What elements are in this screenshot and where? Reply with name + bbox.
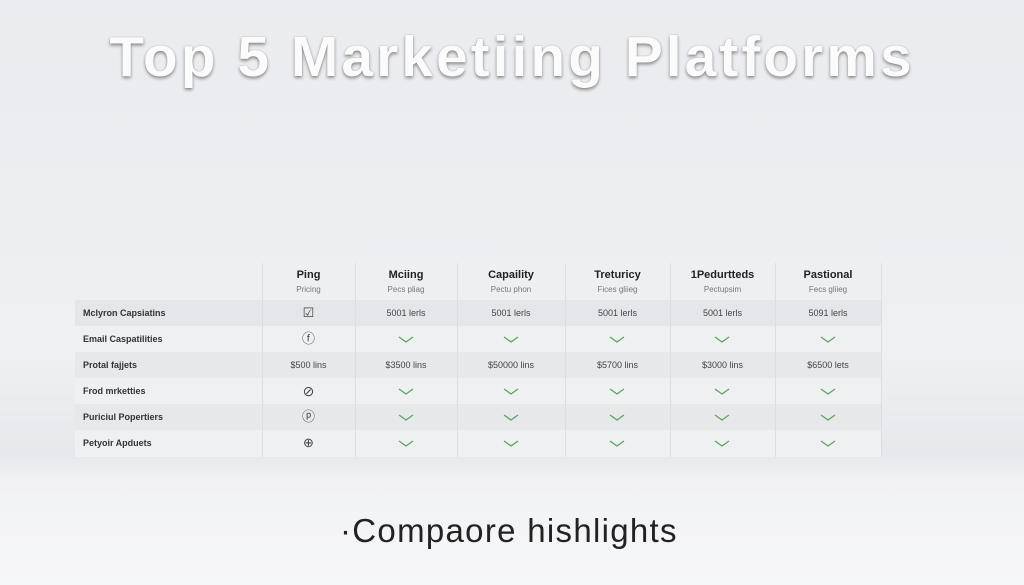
data cells: $5700 lins	[597, 360, 638, 370]
data cells: 5001 lerls	[386, 308, 426, 318]
title: Top 5 Marketiing Platforms	[109, 25, 915, 89]
row labels: Frod mrketties	[83, 386, 146, 396]
data cells: ⊕	[303, 435, 314, 450]
data cells: ⓕ	[302, 331, 315, 346]
data cells: $3500 lins	[385, 360, 427, 370]
data cells: $50000 lins	[488, 360, 534, 370]
column headers: Pricing	[296, 285, 321, 294]
column headers: Pecs pliag	[388, 285, 424, 294]
column headers	[296, 269, 852, 294]
data cells: ⓟ	[302, 409, 315, 424]
data cells: $6500 lets	[807, 360, 849, 370]
comparison table	[75, 263, 882, 457]
row labels: Protal fajjets	[83, 360, 137, 370]
row labels: Puriciul Popertiers	[83, 412, 163, 422]
check icons	[398, 336, 836, 447]
column headers: Pectupsim	[704, 285, 741, 294]
column headers: Treturicy	[594, 269, 641, 281]
row labels: Petyoir Apduets	[83, 438, 152, 448]
data cells: 5001 lerls	[598, 308, 637, 318]
row labels	[83, 308, 166, 448]
footer caption: ·Compaore hishlights	[340, 512, 678, 549]
column headers: Mciing	[389, 269, 423, 281]
data cells: ☑	[303, 305, 314, 320]
data cells: $3000 lins	[702, 360, 743, 370]
column headers: 1Pedurtteds	[691, 269, 754, 281]
data cells: 5001 lerls	[491, 308, 531, 318]
row labels: Mclyron Capsiatins	[83, 308, 166, 318]
column headers: Fices gliieg	[597, 285, 638, 294]
data cells: 5091 lerls	[808, 308, 848, 318]
column headers: Ping	[297, 269, 320, 281]
data cells: $500 lins	[290, 360, 327, 370]
column headers: Pastional	[804, 269, 852, 281]
column headers: Capaility	[488, 269, 534, 281]
data cells: ⊘	[303, 383, 314, 399]
data cells	[290, 305, 849, 450]
data cells: 5001 lerls	[703, 308, 742, 318]
row labels: Email Caspatilities	[83, 334, 163, 344]
column headers: Pectu phon	[491, 285, 531, 294]
column headers: Fecs gliieg	[809, 285, 847, 294]
